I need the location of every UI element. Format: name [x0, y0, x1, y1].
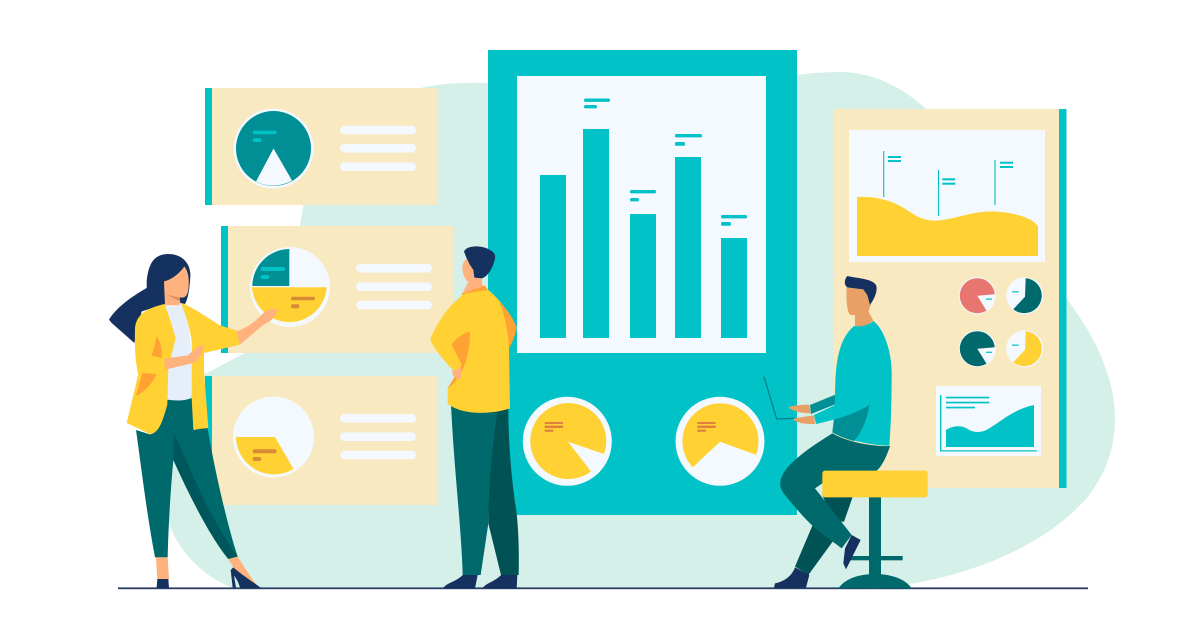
front shoe	[843, 535, 861, 569]
panel: top left card	[205, 88, 438, 205]
background blob	[164, 72, 1115, 588]
back sleeve	[810, 394, 836, 414]
face and neck	[164, 266, 189, 305]
ground line	[118, 587, 1088, 589]
pie: teal with white wedge	[234, 108, 314, 188]
person: man standing	[430, 246, 519, 588]
area chart	[849, 130, 1045, 262]
small area chart	[936, 386, 1041, 456]
sweater	[832, 321, 892, 446]
collar	[461, 286, 488, 297]
pie: white with yellow slice	[233, 396, 314, 478]
man legs	[443, 397, 519, 588]
pie: right gauge	[676, 397, 764, 486]
pie: quarter and half	[250, 247, 330, 327]
neck and face	[846, 287, 873, 327]
hair	[109, 254, 190, 343]
bar chart	[540, 98, 747, 338]
stool	[838, 497, 912, 588]
face and neck	[462, 258, 486, 295]
back shoe	[774, 567, 809, 588]
pointing forearm	[237, 309, 277, 345]
leg shadow under seat	[822, 495, 853, 522]
front sleeve	[814, 397, 870, 424]
sweater shadow	[832, 401, 870, 441]
laptop	[764, 377, 795, 419]
pie: yellow on white	[1006, 330, 1043, 367]
pants front leg	[451, 397, 499, 575]
shoes	[157, 567, 261, 588]
shoes	[443, 575, 517, 588]
pants shadow	[173, 433, 238, 559]
pants back leg	[488, 397, 519, 575]
person: man seated with laptop on stool	[764, 276, 928, 588]
woman upper body	[109, 254, 277, 434]
pie: left gauge	[523, 397, 612, 486]
man seated lower body and stool	[774, 433, 928, 588]
neck shadow	[167, 295, 180, 301]
sweater	[430, 290, 517, 413]
hands	[788, 405, 815, 424]
front leg	[780, 433, 890, 548]
pants	[136, 393, 238, 559]
panel: bottom left card	[205, 376, 438, 505]
pie: dark teal	[959, 330, 996, 367]
other forearm	[164, 345, 203, 370]
hand on hip	[452, 368, 462, 379]
man seated upper body	[764, 276, 892, 446]
hair	[845, 276, 877, 305]
back leg	[795, 523, 835, 575]
shirt	[164, 303, 192, 400]
pie: salmon	[959, 277, 996, 314]
sweater orange shadows	[448, 302, 517, 388]
man upper body	[430, 246, 517, 413]
text lines	[356, 264, 432, 309]
woman lower body	[136, 393, 261, 588]
text lines	[340, 414, 416, 459]
pie: dark teal on white	[1006, 277, 1043, 314]
text lines	[340, 126, 416, 171]
jacket left	[127, 304, 176, 434]
panel: right board	[834, 109, 1066, 488]
panel: middle left card	[221, 226, 453, 353]
person: woman presenting	[109, 254, 277, 588]
jacket orange shadows	[136, 336, 162, 396]
panel: central board	[488, 50, 797, 515]
stool seat	[822, 471, 928, 497]
jacket right and sleeve	[181, 303, 240, 430]
hair	[464, 246, 495, 278]
feet	[156, 557, 257, 585]
